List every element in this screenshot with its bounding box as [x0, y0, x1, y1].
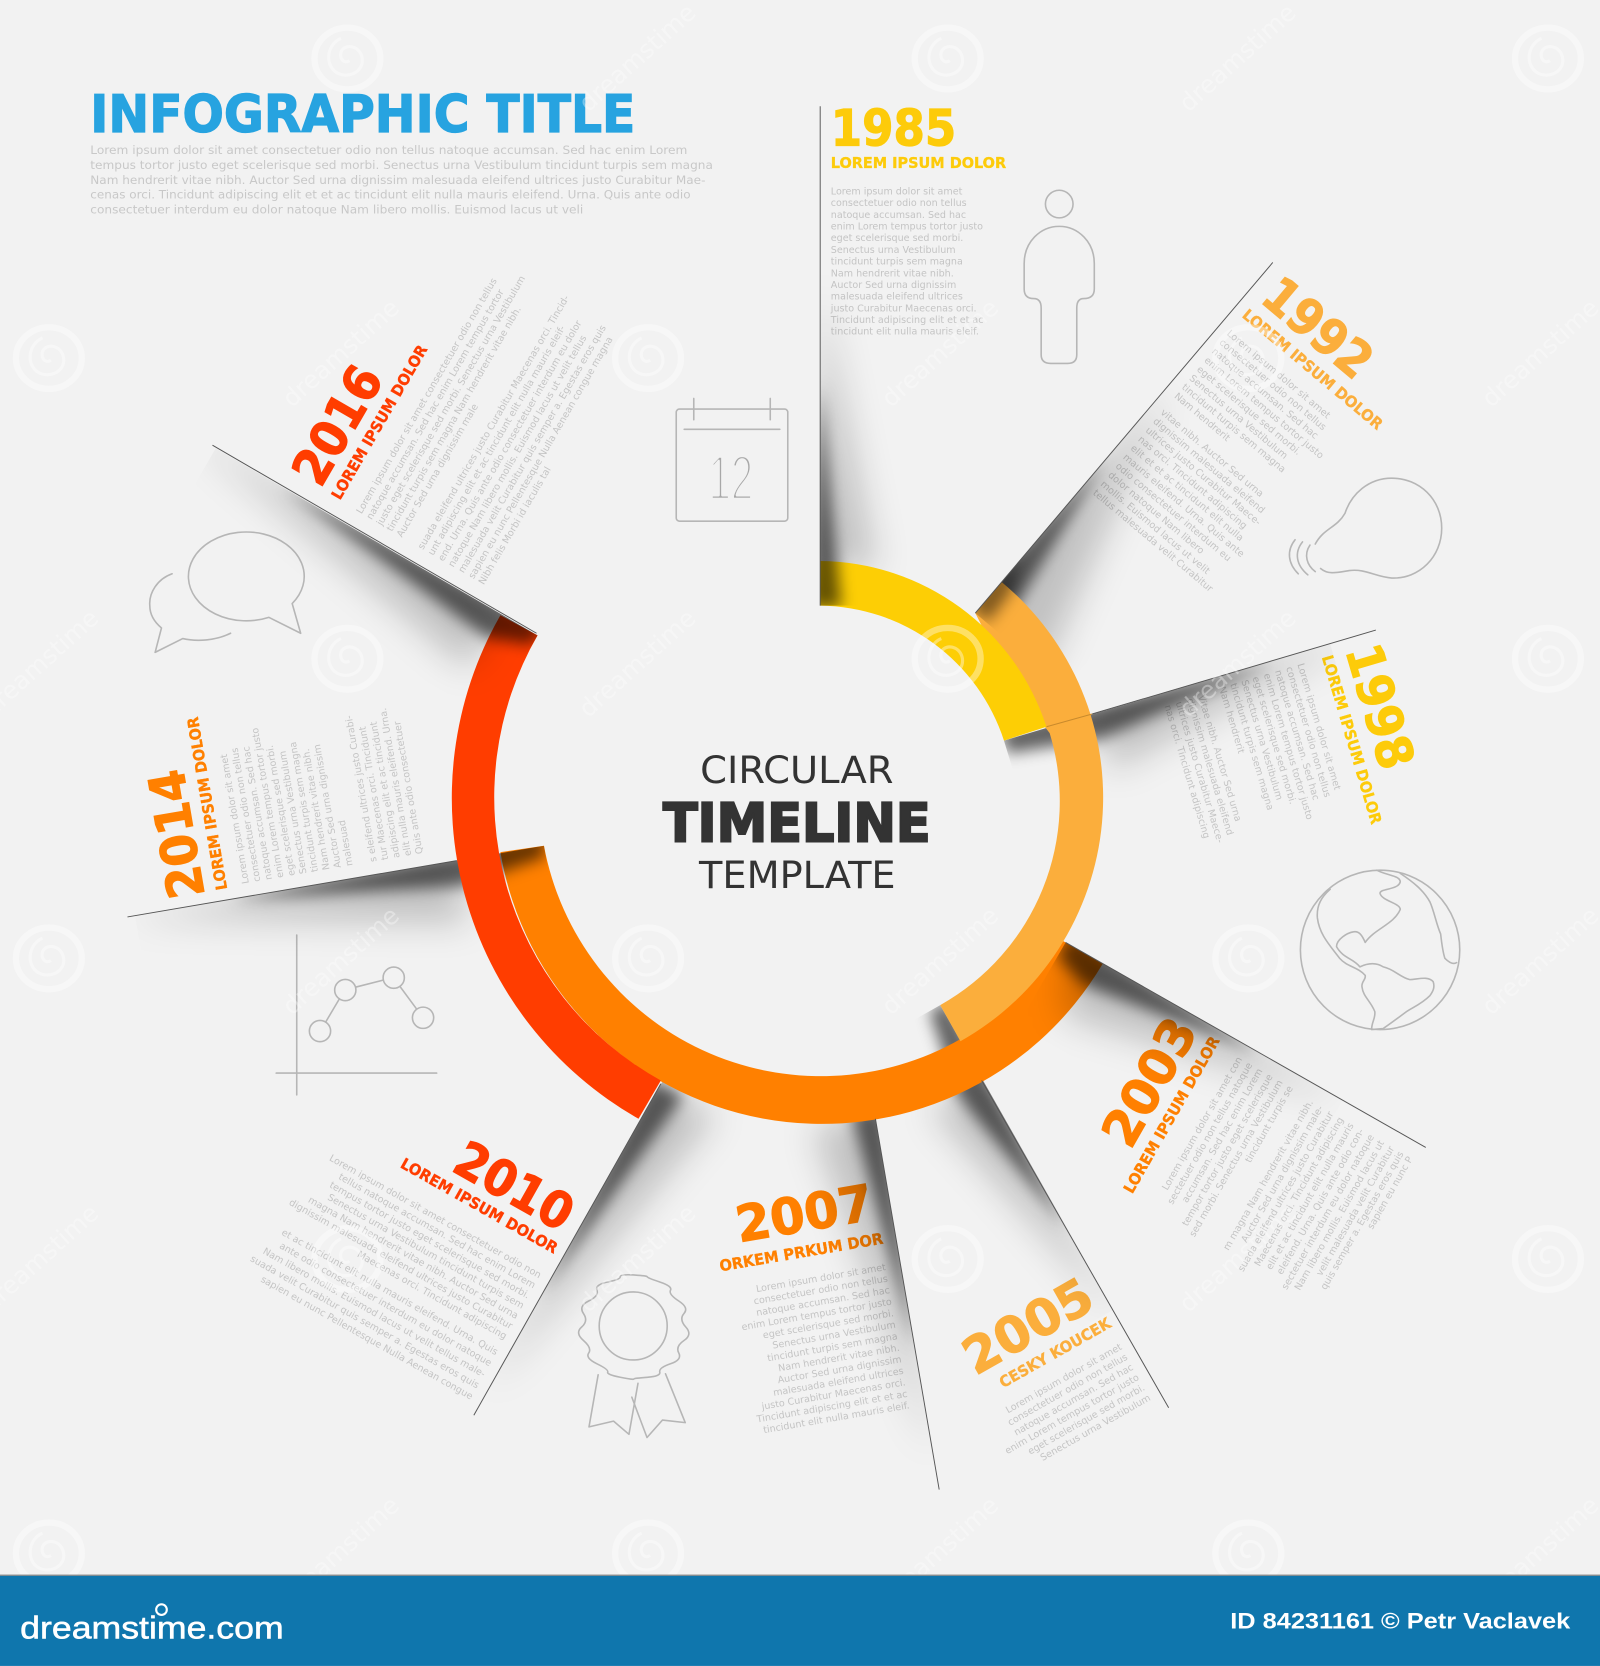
- panel: 1998: natoque accumsan. Sed hac: [1272, 669, 1321, 802]
- panel: 1985: natoque accumsan. Sed hac: [831, 210, 966, 221]
- panel: 1992: enim Lorem tempus tortor justo: [1202, 355, 1326, 461]
- panel: 2014: 2014: [137, 765, 216, 903]
- shadow: 2010 edge: [509, 1082, 720, 1358]
- panel: 2010: Lorem ipsum dolor sit amet consectetuer odio non: [327, 1153, 543, 1281]
- panel: 2010: Nam libero mollis. Euismod lacus ut velit tellus male-: [261, 1246, 487, 1380]
- panel: 1985: LOREM IPSUM DOLOR: [831, 154, 1006, 172]
- panel: 2010: Maecenas orci. Tincidunt adipiscing: [355, 1249, 508, 1342]
- panel: 2007: Senectus urna Vestibulum: [772, 1320, 897, 1352]
- panel: 2003: tempor tortor justo eget scelerisque: [1180, 1072, 1276, 1228]
- panel: 1998: tincidunt turpis sem magna: [1227, 682, 1275, 812]
- panel: 1992: consectetuer odio non tellus: [1217, 337, 1328, 433]
- panel: 2007: Auctor Sed urna dignissim: [777, 1354, 902, 1386]
- panel: 2007: consectetuer odio non tellus: [753, 1274, 889, 1307]
- panel: 2014: Senectus urna Vestibulum: [278, 750, 309, 875]
- panel: 2010: [242, 1066, 588, 1403]
- panel: 2003: Maecenas orci. Tincidunt adipiscing: [1253, 1115, 1346, 1268]
- panel: 1985: tincidunt turpis sem magna: [831, 257, 963, 268]
- watermark text: dreamstime: [876, 901, 1004, 1020]
- panel: 1998: 1998: [1334, 637, 1426, 776]
- ring segment: red: [452, 615, 661, 1119]
- icon: light bulb: [1289, 478, 1442, 578]
- panel: 2007: natoque accumsan. Sed hac: [755, 1285, 891, 1319]
- panel: 2014: Nam hendrerit vitae nibh.: [301, 748, 333, 871]
- panel: 1992: [1091, 263, 1422, 610]
- panel: 2003: sed morbi. Senectus urna Vestibulum: [1188, 1078, 1286, 1239]
- panel: 1985: Lorem ipsum dolor sit amet: [831, 186, 963, 197]
- panel: 2007: 2007: [731, 1174, 877, 1254]
- panel: 2014: Auctor Sed urna dignissim: [312, 743, 344, 869]
- ring segment: yellow: [820, 561, 1046, 741]
- panel: 2016: unt adipiscing elit et ac tincidunt elit nulla mauris eleif-: [426, 324, 568, 557]
- panel: 2003: elit et ac tincidunt elit nulla mauris: [1264, 1121, 1357, 1272]
- panel: 2016: natoque accumsan. Sed hac enim Lorem tempus tortor: [365, 288, 507, 522]
- watermark text: dreamstime: [573, 0, 701, 117]
- shadow: 2016 edge: [220, 453, 538, 674]
- panel: 2005: 2005: [953, 1267, 1103, 1386]
- icon: calendar: 12: [709, 443, 753, 513]
- shadow: 2003 edge: [1048, 942, 1314, 1096]
- panel: 2016: sapien eu nunc Pellentesque Nulla Aenean congue magna: [467, 335, 616, 581]
- panel: 1998: enim Lorem tempus tortor justo: [1261, 672, 1315, 821]
- panel: 2005: Senectus urna Vestibulum: [1039, 1393, 1153, 1464]
- panel: 2005: CESKY KOUCEK: [996, 1314, 1115, 1392]
- panel: 2010: Senectus urna Vestibulum tincidunt turpis sem: [325, 1192, 526, 1312]
- icon: line chart: [276, 935, 437, 1095]
- ring segment: dark orange: [500, 846, 1103, 1124]
- panel: 2007: malesuada eleifend ultrices: [772, 1366, 904, 1399]
- center label: TEMPLATE: [698, 853, 896, 897]
- watermark text: dreamstime: [276, 1490, 405, 1610]
- panel: 1985: malesuada eleifend ultrices: [831, 292, 963, 303]
- panel: 2014: enim Lorem tempus tortor justo: [250, 727, 286, 879]
- panel: 1998: Nam hendrerit: [1216, 685, 1246, 755]
- intro paragraph: Nam hendrerit vitae nibh. Auctor Sed urna dignissim malesuada eleifend ultrices justo Curabitur Mae-: [90, 173, 705, 187]
- panel: 2005: eget scelerisque sed morbi.: [1026, 1382, 1147, 1457]
- panel: 2003: Nam libero mollis. Euismod lacus ut: [1293, 1138, 1387, 1293]
- panel: 1998: nas orci. Tincidunt adipiscing: [1162, 704, 1212, 840]
- panel: 1998: ultrices justo Curabitur Maece-: [1173, 700, 1225, 844]
- panel: 2010: dignissim malesuada eleifend ultrices justo Curabitur: [287, 1197, 514, 1332]
- panel: 2007: justo Curabitur Maecenas orci.: [760, 1377, 906, 1413]
- watermark text: dreamstime: [1173, 603, 1302, 723]
- panel: 2010: LOREM IPSUM DOLOR: [397, 1155, 561, 1258]
- panel: 2016: malesuada velit Curabitur quis semper a. Egestas eros quis: [457, 323, 609, 575]
- panel: 1992: dolor natoque Nam libero: [1106, 470, 1206, 557]
- panel: 1985: justo Curabitur Maecenas orci.: [830, 303, 977, 314]
- panel: 2005: consectetuer odio non tellus: [1006, 1352, 1130, 1428]
- panel: 1992: 1992: [1251, 265, 1384, 390]
- panel: 2010: tellus natoque accumsan. Sed hac enim Lorem: [336, 1172, 537, 1291]
- panel: 1998: Vitae nibh. Auctor Sed urna: [1195, 694, 1243, 823]
- shadow: 1992 edge on ring: [976, 556, 1024, 628]
- panel: 2016: tincidunt turpis sem magna Nam hendrerit vitae nibh.: [385, 305, 524, 533]
- panel: 2010: suada velit Curabitur quis semper a. Egestas eros quis: [248, 1254, 481, 1391]
- panel: 1985: eget scelerisque sed morbi.: [831, 233, 963, 244]
- panel: 2007: [708, 1173, 913, 1439]
- panel: 2016: justo eget scelerisque sed morbi. Senectus urna Vestibulum: [374, 274, 528, 528]
- shadow: 1998 edge: [1004, 646, 1329, 776]
- panel: 1992: elit et et ac tincidunt elit nulla: [1128, 443, 1245, 544]
- panel: 2010: sapien eu nunc Pellentesque Nulla Aenean congue: [259, 1274, 475, 1402]
- panel: 2003: eleifend. Urna. Quis ante odio con-: [1275, 1127, 1367, 1277]
- shadow: 1985 edge: [810, 383, 841, 608]
- panel: 2016: end. Urna. Quis ante odio consectetuer interdum eu dolor: [436, 319, 584, 563]
- panel: 2003: 2003: [1090, 1008, 1209, 1157]
- panel: 2005: Lorem ipsum dolor sit amet: [1004, 1342, 1124, 1416]
- panel edge lines: [127, 106, 1426, 1490]
- panel: 2003: sectetuer interdum eu dolor natoque: [1280, 1133, 1377, 1292]
- panel: 1992: mauris eleifend. Urna. Quis ante: [1121, 452, 1246, 560]
- panel: 2016: [279, 215, 633, 588]
- watermark text: dreamstime: [1173, 1198, 1302, 1318]
- panel: 2010: tempus tortor justo eget scelerisque sed morbi.: [327, 1180, 531, 1301]
- panel: 1998: Lorem ipsum dolor sit amet: [1294, 662, 1342, 792]
- panel: 2003: suada eleifend ultrices justo Curabitur: [1236, 1110, 1336, 1274]
- panel: 1985: enim Lorem tempus tortor justo: [831, 222, 983, 233]
- panel: 2007: Tincidunt adipiscing elit et et ac: [755, 1389, 908, 1426]
- panel: 1992: LOREM IPSUM DOLOR: [1239, 306, 1386, 434]
- panel: 1985: Tincidunt adipiscing elit et et ac: [830, 315, 984, 326]
- icon: calendar: [676, 398, 788, 521]
- panel: 1992: tincidunt turpis sem magna: [1179, 382, 1287, 475]
- panel: 1985: [830, 100, 1006, 338]
- watermark text: dreamstime: [876, 293, 1004, 413]
- footer credit: ID 84231161 © Petr Vaclavek: [1230, 1609, 1571, 1634]
- icon: medal: [579, 1275, 689, 1438]
- shadow: 2014 edge: [125, 835, 546, 923]
- panel: 1992: tellus malesuada velit Curabitur: [1091, 488, 1215, 595]
- center label: CIRCULAR: [700, 748, 893, 792]
- panel: 1998: dignissim malesuada eleifend: [1184, 697, 1235, 837]
- panel: 2014: LOREM IPSUM DOLOR: [184, 715, 231, 891]
- panel: 2014: Quis ante odio consectetuer: [392, 720, 426, 855]
- panel: 2016: Nibh felis Morbi id iaculis tal: [477, 465, 554, 587]
- panel: 1992: ultrices justo Curabitur Maece-: [1143, 425, 1263, 528]
- footer band: [0, 1575, 1600, 1666]
- panel: 2014: Lorem ipsum dolor sit amet: [219, 753, 252, 885]
- panel: 2007: tincidunt elit nulla mauris eleif.: [763, 1400, 910, 1436]
- panel: 2010: 2010: [444, 1130, 584, 1243]
- panel: 1985: Auctor Sed urna dignissim: [831, 280, 956, 291]
- panel: 2016: natoque Nam libero mollis. Euismod lacus ut velit tellus: [446, 334, 589, 569]
- panel: 2005: [943, 1265, 1155, 1477]
- panel: 1992: Nam hendrerit: [1172, 391, 1232, 444]
- panel: 2014: [129, 682, 426, 903]
- ring segment: light orange: [940, 582, 1103, 1041]
- watermark text: dreamstime: [1173, 0, 1302, 117]
- panel: 2003: sectetuer odio non tellus natoque: [1166, 1061, 1255, 1206]
- panel: 2003: quis semper a. Egestas eros quis: [1319, 1150, 1406, 1292]
- panel: 2016: LOREM IPSUM DOLOR: [328, 342, 431, 503]
- panel: 2016: Auctor Sed urna dignissim male: [395, 402, 481, 539]
- shadow: 2005 edge: [921, 1005, 1101, 1294]
- footer logo: dreamstime.com: [20, 1609, 284, 1645]
- panel: 1992: dignissim malesuada eleifend: [1151, 416, 1267, 516]
- panel: 2014: adipiscing elit et ac tincidunt: [368, 720, 403, 859]
- intro paragraph: cenas orci. Tincidunt adipiscing elit et et ac tincidunt elit nulla mauris eleifend. Urna. Quis ante odio: [90, 188, 691, 202]
- watermark text: dreamstime: [876, 1490, 1004, 1610]
- watermark text: dreamstime: [276, 901, 405, 1020]
- panel: 2005: enim Lorem tempus tortor justo: [1003, 1372, 1141, 1457]
- panel: 1992: natoque accumsan. Sed hac: [1209, 346, 1320, 442]
- panel: 2010: magna Nam hendrerit vitae nibh. Auctor Sed urna: [306, 1195, 520, 1322]
- shadow: 1992 edge outside ring: [1002, 404, 1164, 658]
- intro paragraph: tempus tortor justo eget scelerisque sed morbi. Senectus urna Vestibulum tincidunt turpis sem magna: [90, 158, 713, 172]
- panel: 2014: elit nulla mauris eleifend. Urna.: [378, 707, 414, 857]
- panel: 1985: tincidunt elit nulla mauris eleif.: [831, 327, 979, 338]
- panel: 2016: Lorem ipsum dolor sit amet consectetuer odio non tellus: [355, 276, 500, 516]
- panel: 2014: eget scelerisque sed morbi.: [265, 744, 298, 877]
- panel: 1985: Senectus urna Vestibulum: [831, 245, 956, 256]
- watermark text: dreamstime: [573, 1198, 701, 1318]
- panel: 2007: tincidunt turpis sem magna: [767, 1331, 899, 1364]
- watermark text: dreamstime: [276, 293, 405, 413]
- intro paragraph: [90, 143, 713, 217]
- panel: 1985: 1985: [831, 100, 956, 158]
- icon: speech bubbles: [150, 532, 304, 652]
- panel: 2007: enim Lorem tempus tortor justo: [741, 1297, 893, 1333]
- panel: 2003: [1066, 1006, 1419, 1319]
- panel: 1998: [1161, 637, 1439, 873]
- panel: 2010: et ac tincidunt elit nulla mauris eleifend. Urna. Quis: [279, 1227, 500, 1358]
- panel: 1992: vitae nibh. Auctor Sed urna: [1158, 407, 1265, 500]
- panel: 2003: sapien eu nunc P: [1366, 1155, 1416, 1231]
- panel: 2014: natoque accumsan. Sed hac: [241, 745, 275, 881]
- panel: 1992: nas orci. Tincidunt adipiscing: [1136, 434, 1249, 532]
- panel: 1992: Lorem ipsum dolor sit amet: [1224, 328, 1332, 421]
- panel: 1998: Senectus urna Vestibulum: [1238, 679, 1284, 802]
- panel: 2016: 2016: [281, 355, 395, 495]
- panel: 2014: tincidunt turpis sem magna: [288, 741, 321, 873]
- panel: 2007: ORKEM PRKUM DOR: [718, 1230, 885, 1275]
- panel: 2016: suada eleifend ultrices justo Curabitur Maecenas orci. Tincid-: [416, 294, 572, 552]
- panel: 2007: eget scelerisque sed morbi.: [762, 1308, 895, 1341]
- panel: 2007: Lorem ipsum dolor sit amet: [755, 1262, 887, 1295]
- icon: globe: [1300, 870, 1460, 1030]
- panel: 1992: mollis. Euismod lacus ut velit: [1098, 479, 1212, 577]
- icon: person: [1024, 190, 1094, 363]
- panel: 2003: accumsan. Sed hac enim Lorem: [1180, 1067, 1265, 1205]
- panel: 1985: Nam hendrerit vitae nibh.: [831, 268, 954, 279]
- panel: 2014: malesuad: [337, 819, 356, 867]
- shadow: 2007 edge: [804, 1120, 926, 1416]
- title: INFOGRAPHIC TITLE: [90, 85, 635, 145]
- intro paragraph: consectetuer interdum eu dolor natoque Nam libero mollis. Euismod lacus ut veli: [90, 203, 583, 217]
- panel: 1998: eget scelerisque sed morbi.: [1250, 675, 1298, 806]
- panel: 2014: consectetuer odio non tellus: [230, 747, 263, 883]
- panel: 2014: s eleifend ultrices justo Curabi-: [344, 714, 380, 863]
- panel: 2003: Lorem ipsum dolor sit amet con: [1160, 1055, 1245, 1192]
- panel: 1992: eget scelerisque sed morbi.: [1194, 364, 1303, 458]
- center label: TIMELINE: [663, 792, 931, 854]
- panel: 1985: consectetuer odio non tellus: [831, 198, 967, 209]
- watermark text: dreamstime: [573, 603, 701, 723]
- panel: 2010: ante odio consectetuer interdum eu dolor natoque: [277, 1241, 493, 1369]
- shadow: 1985 edge soft: [820, 287, 876, 568]
- panel: 2003: Auctor Sed urna dignissim male-: [1239, 1104, 1326, 1245]
- center label: [663, 748, 931, 897]
- panel: 2003: m magna Nam hendrerit vitae nibh.: [1221, 1098, 1316, 1252]
- panel: 2014: tur Maecenas orci. Tincidunt: [357, 725, 391, 861]
- panel: 2007: Nam hendrerit vitae nibh.: [777, 1343, 900, 1374]
- panel: 2003: LOREM IPSUM DOLOR: [1120, 1033, 1224, 1196]
- panel: 2005: natoque accumsan. Sed hac: [1012, 1362, 1135, 1438]
- panel: 1992: Senectus urna Vestibulum: [1187, 373, 1289, 462]
- panel: 2003: velit malesuada velit Curabitur: [1314, 1144, 1397, 1278]
- panel: 2003: tincidunt turpis se: [1243, 1084, 1296, 1165]
- panel: 1998: LOREM IPSUM DOLOR: [1318, 653, 1385, 827]
- panel: 1998: consectetuer odio non tellus: [1283, 665, 1332, 799]
- panel: 1992: odio consectetuer interdum eu: [1113, 461, 1233, 564]
- intro paragraph: Lorem ipsum dolor sit amet consectetuer odio non tellus natoque accumsan. Sed hac enim Lorem: [90, 143, 687, 157]
